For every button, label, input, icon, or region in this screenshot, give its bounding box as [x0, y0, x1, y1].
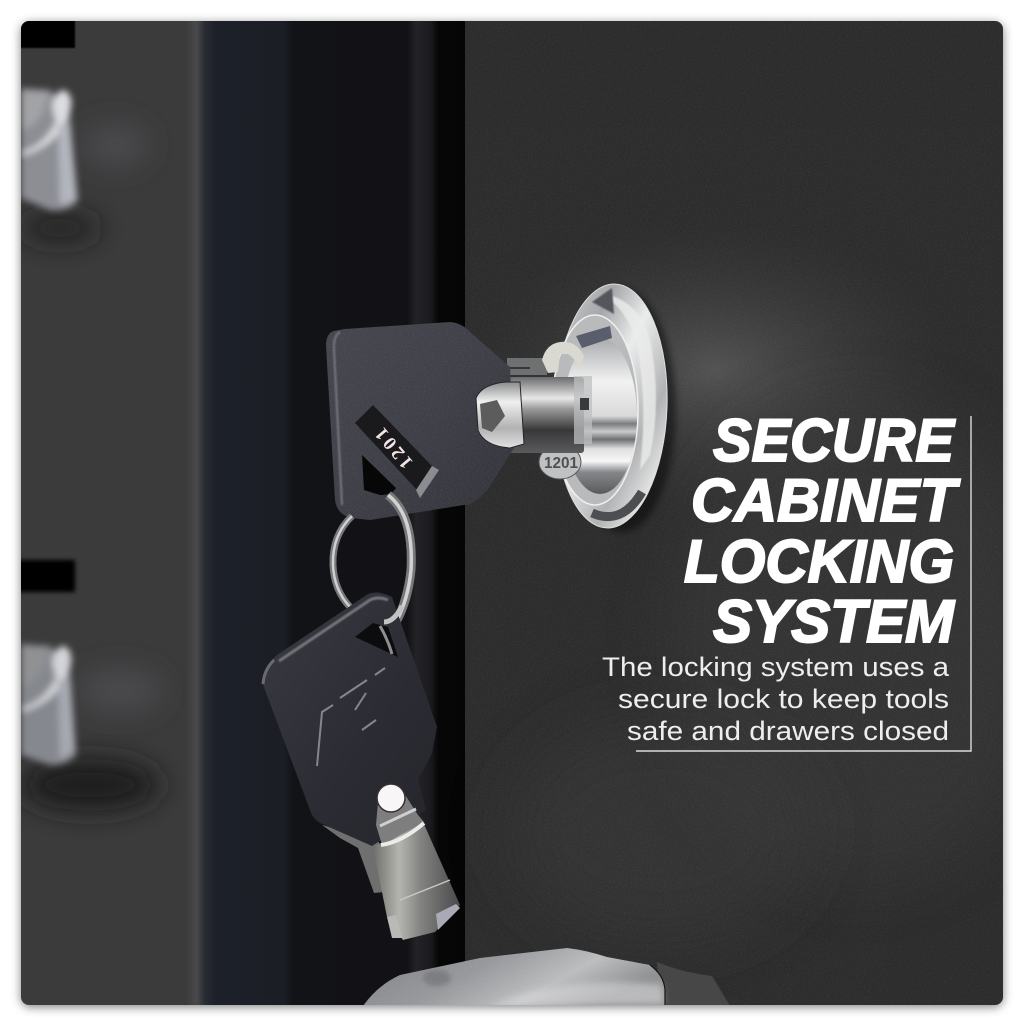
chrome cone: [563, 338, 637, 494]
key hole: [355, 623, 398, 657]
bottom silver handle: [363, 948, 730, 1006]
key shaft: [373, 822, 460, 940]
description: [602, 652, 950, 746]
lock bezel: [551, 282, 671, 530]
key blade: [322, 825, 382, 893]
inner ring: [552, 315, 638, 505]
key number: 1201: [369, 421, 417, 473]
drawer gap lower: [15, 560, 75, 592]
pin neck: [376, 790, 424, 845]
bezel highlight: [612, 296, 656, 470]
key head: [262, 593, 437, 846]
lock shadow: [608, 288, 678, 533]
lock key stamp: 1201: [544, 455, 578, 472]
ring through hole: [380, 626, 392, 654]
door texture: [465, 21, 1005, 1005]
strip reflections: [20, 125, 162, 811]
brand logo: [317, 668, 385, 766]
door light glow: [634, 272, 886, 854]
bezel dark patch: [592, 288, 614, 314]
key blade: [507, 358, 592, 453]
blue-grey reflection: [576, 326, 612, 348]
description: secure lock to keep tools: [618, 684, 949, 714]
title: CABINET: [691, 467, 960, 534]
key tip: [480, 400, 505, 432]
drawer gap top: [21, 21, 76, 49]
title: [684, 407, 960, 655]
top key: [326, 322, 524, 522]
key ring: [333, 495, 411, 622]
shaft end: [436, 904, 460, 930]
title: SECURE: [713, 407, 956, 474]
cabinet left strip: [21, 21, 191, 1005]
plate edge highlight: [416, 466, 439, 498]
ring over key: [384, 606, 402, 622]
key pin highlight: [377, 784, 405, 812]
description: The locking system uses a: [602, 652, 950, 682]
shaft band: [400, 880, 450, 900]
cabinet door: [465, 21, 1005, 1005]
lower bezel mirror: [592, 492, 642, 517]
number plate: [355, 405, 432, 490]
white lock clip: [542, 342, 584, 373]
key socket: [476, 382, 524, 448]
shaft notch: [387, 915, 402, 938]
lock key stamp: [538, 453, 582, 480]
title: SYSTEM: [713, 588, 956, 655]
callout: title and description: [602, 407, 971, 751]
corner bracket line: [636, 416, 971, 751]
drawer handle lower: [21, 644, 76, 765]
drawer handle top: [21, 88, 78, 210]
frame column: [185, 21, 467, 1005]
title: LOCKING: [684, 528, 954, 595]
key hole: [362, 455, 396, 495]
lower key: [262, 593, 460, 940]
description: safe and drawers closed: [627, 716, 949, 746]
